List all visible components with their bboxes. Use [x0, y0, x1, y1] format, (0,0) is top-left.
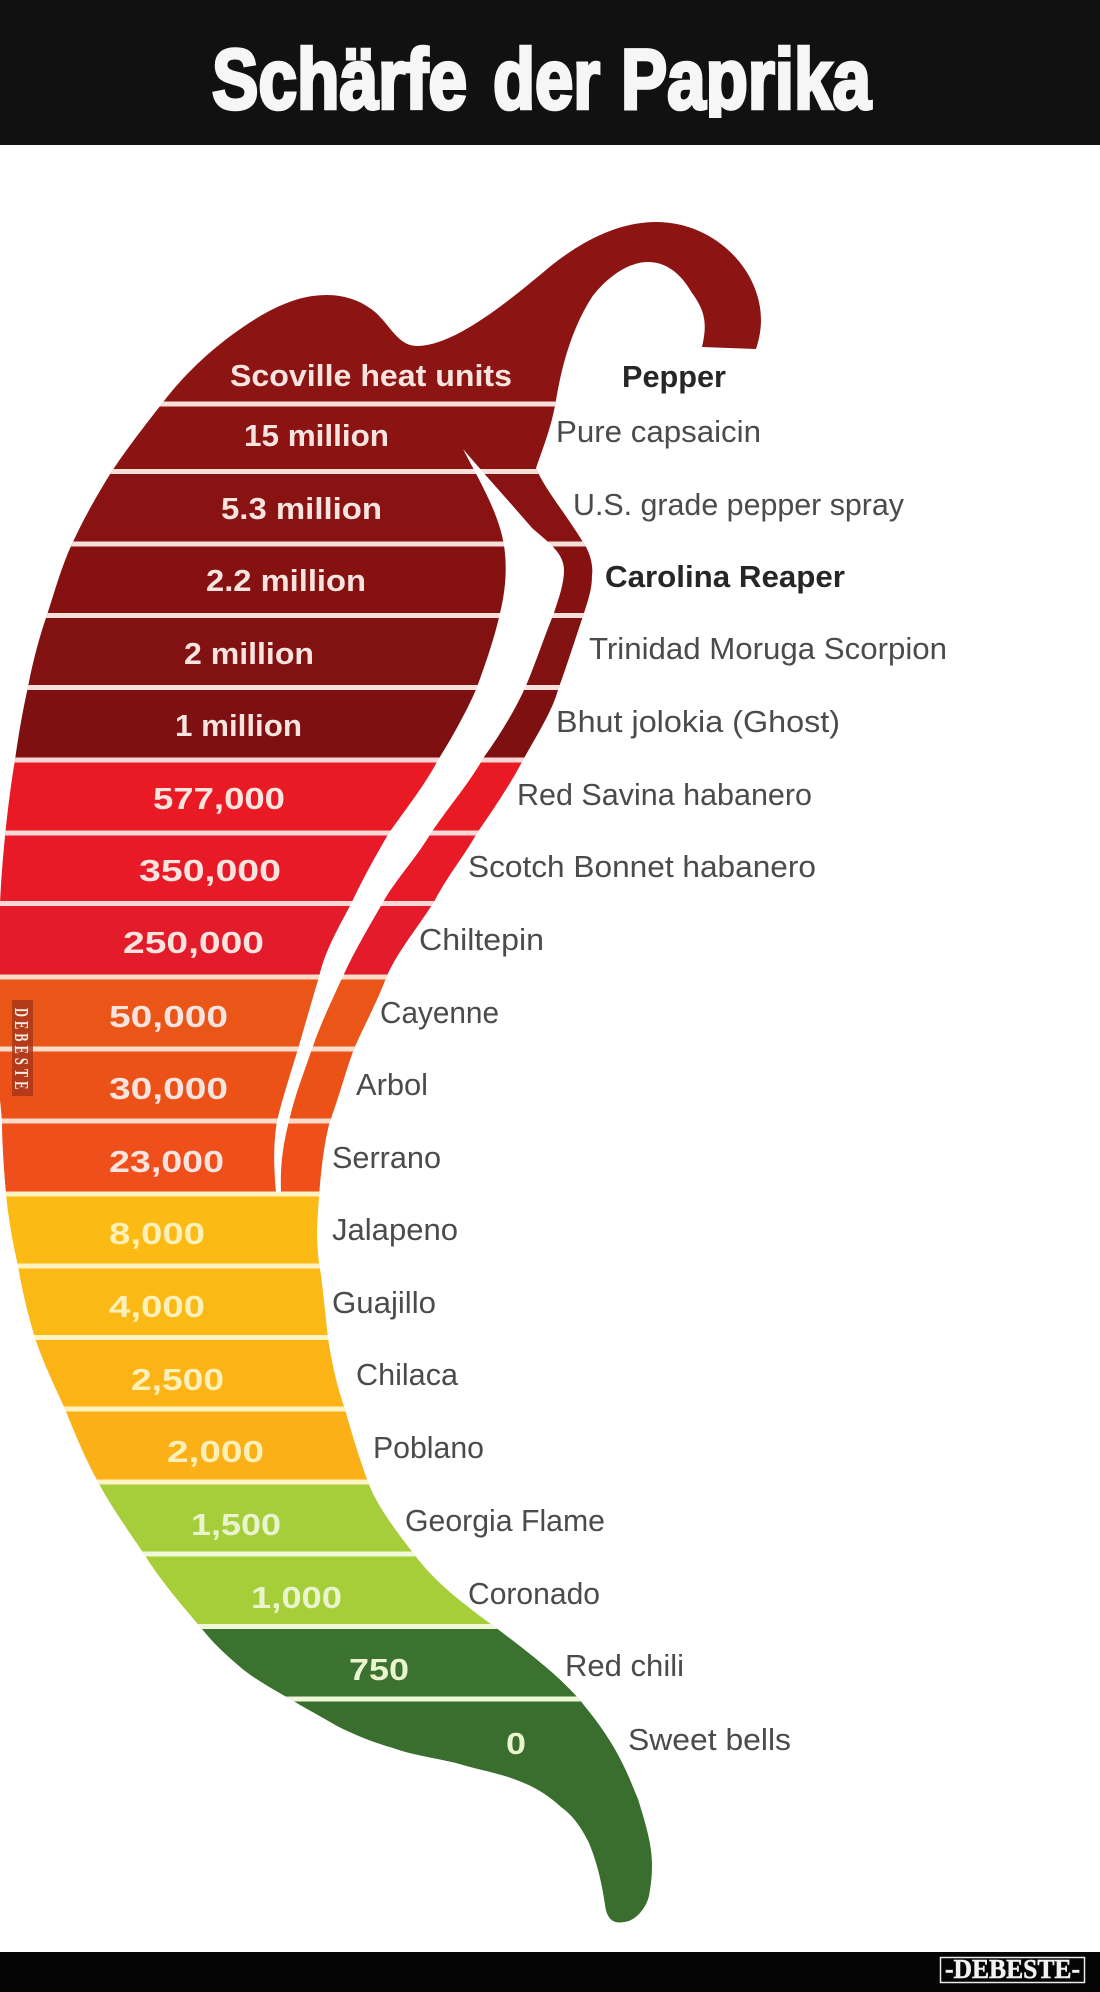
band: 577,000	[5, 760, 523, 833]
name: Carolina Reaper: Carolina Reaper	[605, 559, 845, 594]
band: 8,000	[6, 1194, 320, 1266]
pepper chart	[0, 200, 947, 1939]
value: 250,000: 250,000	[123, 925, 264, 960]
value: 1 million: 1 million	[175, 708, 302, 743]
band: 250,000	[0, 904, 432, 977]
footer bar	[0, 1952, 1100, 1992]
name: Red Savina habanero: Red Savina habanero	[517, 777, 812, 812]
band: 23,000	[2, 1121, 330, 1194]
band: 1,500	[98, 1482, 414, 1554]
vertical watermark: DEBESTE	[10, 1008, 33, 1093]
band: 0	[290, 1699, 652, 1922]
name: Chilaca: Chilaca	[356, 1357, 459, 1392]
name: U.S. grade pepper spray: U.S. grade pepper spray	[573, 487, 904, 522]
band: 15 million	[111, 404, 556, 472]
value: 2,000: 2,000	[167, 1434, 264, 1469]
value: 50,000: 50,000	[109, 999, 228, 1034]
value: 0: 0	[506, 1726, 526, 1761]
header bar	[0, 0, 1100, 145]
value: 2.2 million: 2.2 million	[206, 563, 366, 598]
value: 1,000: 1,000	[251, 1580, 342, 1615]
white inner slit	[274, 449, 564, 1192]
value: 577,000: 577,000	[153, 781, 285, 816]
band: 30,000	[0, 1049, 354, 1121]
band: 2.2 million	[46, 544, 592, 616]
column heading: Scoville heat units: Scoville heat units	[230, 358, 512, 393]
value: 23,000: 23,000	[109, 1144, 224, 1179]
value: 1,500: 1,500	[191, 1507, 281, 1542]
band: 750	[200, 1627, 579, 1699]
title: der	[493, 32, 600, 128]
name: Georgia Flame: Georgia Flame	[405, 1503, 605, 1538]
value: 5.3 million: 5.3 million	[221, 491, 382, 526]
value: 8,000: 8,000	[109, 1216, 205, 1251]
band: 2,000	[65, 1409, 368, 1482]
value: 30,000: 30,000	[109, 1071, 228, 1106]
name: Poblano: Poblano	[373, 1430, 484, 1465]
scoville values	[109, 358, 526, 1761]
name: Chiltepin: Chiltepin	[419, 922, 544, 957]
name: Coronado: Coronado	[468, 1576, 600, 1611]
name: Red chili: Red chili	[565, 1648, 684, 1683]
name: Jalapeno: Jalapeno	[332, 1212, 458, 1247]
pepper bands	[0, 200, 800, 1939]
title: Schärfe	[212, 32, 467, 128]
band: 2,500	[35, 1338, 345, 1409]
band: 1,000	[144, 1554, 495, 1627]
band: 5.3 million	[72, 472, 584, 544]
band: 350,000	[0, 833, 477, 904]
value: 350,000: 350,000	[139, 853, 281, 888]
name: Scotch Bonnet habanero: Scotch Bonnet habanero	[468, 849, 816, 884]
column heading: Pepper: Pepper	[622, 359, 726, 394]
name: Guajillo: Guajillo	[332, 1285, 436, 1320]
band: 4,000	[18, 1266, 328, 1338]
value: 4,000: 4,000	[109, 1289, 205, 1324]
band: 50,000	[0, 977, 386, 1049]
name: Pure capsaicin: Pure capsaicin	[556, 414, 761, 449]
band: 2 million	[28, 616, 583, 688]
name: Cayenne: Cayenne	[380, 995, 499, 1030]
band: header and stem	[162, 222, 761, 404]
name: Bhut jolokia (Ghost): Bhut jolokia (Ghost)	[556, 704, 840, 739]
footer logo: -DEBESTE-	[945, 1954, 1080, 1984]
value: 15 million: 15 million	[244, 418, 389, 453]
title	[212, 44, 873, 118]
value: 750: 750	[349, 1652, 409, 1687]
name: Arbol: Arbol	[356, 1067, 428, 1102]
name: Sweet bells: Sweet bells	[628, 1722, 791, 1757]
title: Paprika	[621, 32, 872, 128]
name: Trinidad Moruga Scorpion: Trinidad Moruga Scorpion	[589, 631, 947, 666]
pepper names	[332, 359, 947, 1757]
name: Serrano: Serrano	[332, 1140, 441, 1175]
value: 2,500: 2,500	[131, 1362, 224, 1397]
value: 2 million: 2 million	[184, 636, 314, 671]
band: 1 million	[15, 688, 559, 760]
